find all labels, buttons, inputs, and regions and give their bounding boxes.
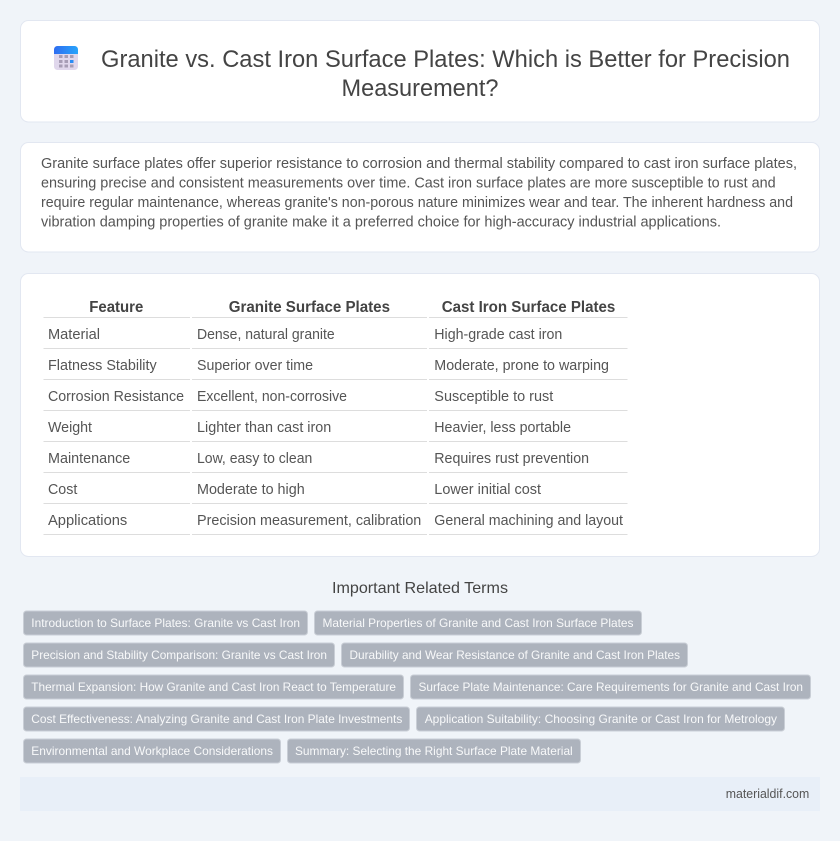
row: applications: Precision measurement, calibration [197,513,421,529]
text block: summary: ensuring precise and consistent measurements over time. Cast iron surface plates are more susceptible to rust and [41,176,776,192]
row: cost: Cost [48,482,77,498]
row: applications: General machining and layout [434,513,623,529]
row: weight: Weight [48,420,92,436]
row: maintenance: Maintenance [48,451,130,467]
panel: comparison table [20,274,820,556]
footer source text: materialdif.com [726,786,809,801]
row: cost: Lower initial cost [434,482,541,498]
row: weight: Heavier, less portable [434,420,571,436]
row: material [48,327,562,343]
row: material: Material [48,327,100,343]
tag [24,675,404,699]
row: applications: Applications [48,513,127,529]
table header row: Feature [89,299,143,316]
row: corrosion resistance: Corrosion Resistance [48,389,184,405]
tag: Cost Effectiveness: Analyzing Granite and Cast Iron Plate Investments [31,712,402,726]
tag: Thermal Expansion: How Granite and Cast Iron React to Temperature [31,680,396,694]
row: maintenance [48,451,589,467]
row: material: High-grade cast iron [434,327,562,343]
tag: Environmental and Workplace Considerations [31,744,273,758]
tag: Summary: Selecting the Right Surface Plate Material [295,744,573,758]
row: corrosion resistance: Excellent, non-corrosive [197,389,347,405]
row: maintenance: Requires rust prevention [434,451,589,467]
footer bar [20,777,820,811]
tag: Material Properties of Granite and Cast Iron Surface Plates [322,616,634,630]
table header row: Cast Iron Surface Plates [442,299,615,316]
icon: calendar [54,46,78,70]
row: weight [48,420,571,436]
text block: summary [41,156,797,230]
text block: summary: require regular maintenance, whereas granite's non-porous nature minimizes wear and tear. The inherent hardness and [41,195,793,211]
heading: related terms: Important Related Terms [332,580,508,597]
row: corrosion resistance: Susceptible to rust [434,389,553,405]
tag [416,707,784,731]
tag [24,739,280,763]
row: corrosion resistance [48,389,553,405]
tag [24,643,334,667]
table header row: Granite Surface Plates [229,299,390,316]
title [101,46,790,102]
tag: Introduction to Surface Plates: Granite vs Cast Iron [31,616,300,630]
tag [24,707,410,731]
tag: Application Suitability: Choosing Granite or Cast Iron for Metrology [425,712,777,726]
tag [288,739,580,763]
row: flatness stability [48,358,609,374]
title: Measurement? [342,75,498,102]
text block: summary: Granite surface plates offer superior resistance to corrosion and thermal stability compared to cast iron surface plates, [41,156,797,172]
tag [314,611,642,635]
table header row [89,299,615,316]
row: weight: Lighter than cast iron [197,420,331,436]
row: applications [48,513,623,529]
row: flatness stability: Superior over time [197,358,313,374]
panel: summary paragraph [20,142,820,252]
tag list: related terms [24,611,810,763]
tag [342,643,688,667]
row: cost: Moderate to high [197,482,305,498]
panel: header [20,20,820,122]
tag: Surface Plate Maintenance: Care Requirements for Granite and Cast Iron [418,680,803,694]
text block: summary: vibration damping properties of granite make it a preferred choice for high-accuracy industrial applications. [41,214,721,230]
row: flatness stability: Flatness Stability [48,358,157,374]
title: Granite vs. Cast Iron Surface Plates: Which is Better for Precision [101,46,790,73]
row: cost [48,482,541,498]
row: flatness stability: Moderate, prone to warping [434,358,609,374]
row: material: Dense, natural granite [197,327,335,343]
row: maintenance: Low, easy to clean [197,451,312,467]
tag [24,611,308,635]
tag: Durability and Wear Resistance of Granite and Cast Iron Plates [350,648,680,662]
tag [410,675,810,699]
tag: Precision and Stability Comparison: Granite vs Cast Iron [31,648,327,662]
